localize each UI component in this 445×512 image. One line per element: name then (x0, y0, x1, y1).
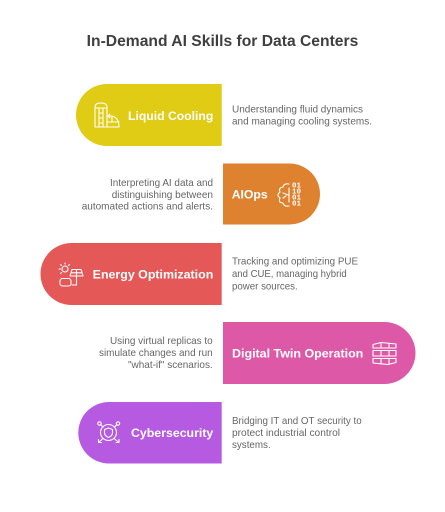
text: Energy Optimization description: Tracking and optimizing PUE (232, 257, 358, 268)
title: In-Demand AI Skills for Data Centers (87, 33, 359, 50)
pill: Cybersecurity (78, 402, 222, 464)
text: AIOps description: automated actions and alerts. (82, 202, 213, 212)
icon: AI brain with binary: 10 (292, 188, 302, 196)
text: Liquid Cooling description: and managing cooling systems. (232, 116, 372, 127)
row: AIOps (223, 164, 320, 224)
text: Digital Twin description (99, 336, 213, 371)
text: Digital Twin description: "what-if" scenarios. (128, 360, 213, 371)
text: Digital Twin description: simulate changes and run (99, 348, 213, 359)
label: Energy Optimization: Energy Optimization (93, 267, 213, 281)
text: Energy Optimization description: power sources. (232, 281, 298, 292)
icon: shield with network (98, 422, 120, 442)
icon: cooling tower (95, 103, 119, 127)
icon: AI brain with binary: 01 (292, 182, 302, 190)
label: AIOps: AIOps (232, 188, 268, 202)
text: AIOps description: distinguishing between (112, 190, 213, 201)
text: Energy Optimization description: and CUE, managing hybrid (232, 269, 347, 280)
text: Cybersecurity description: protect industrial control (232, 428, 340, 439)
icon: stacked layers (373, 342, 396, 364)
pill: Energy Optimization (40, 243, 222, 305)
text: Liquid Cooling description (232, 104, 372, 127)
icon: AI brain with binary (278, 182, 302, 208)
row: Cybersecurity (78, 402, 222, 464)
text: Liquid Cooling description: Understanding fluid dynamics (232, 104, 363, 116)
icon: solar panel and battery (59, 263, 83, 286)
label: Digital Twin Operation: Digital Twin Operation (232, 347, 363, 361)
pill: AIOps (223, 164, 320, 224)
text: AIOps description (82, 178, 213, 212)
pill: Digital Twin Operation (223, 322, 416, 384)
icon: AI brain with binary: 01 (292, 200, 302, 208)
text: Cybersecurity description: Bridging IT and OT security to (232, 416, 362, 427)
text: Digital Twin description: Using virtual replicas to (110, 336, 213, 347)
label: Liquid Cooling: Liquid Cooling (128, 109, 213, 123)
row: Digital Twin Operation (223, 322, 416, 384)
icon: AI brain with binary: 01 (292, 194, 302, 202)
text: AIOps description: Interpreting AI data and (110, 178, 213, 189)
row: Energy Optimization (40, 243, 222, 305)
text: Energy Optimization description (232, 257, 358, 292)
pill: Liquid Cooling (76, 84, 222, 146)
text: Cybersecurity description: systems. (232, 440, 271, 451)
row: Liquid Cooling (76, 84, 222, 146)
label: Cybersecurity: Cybersecurity (131, 426, 213, 440)
text: Cybersecurity description (232, 416, 362, 451)
